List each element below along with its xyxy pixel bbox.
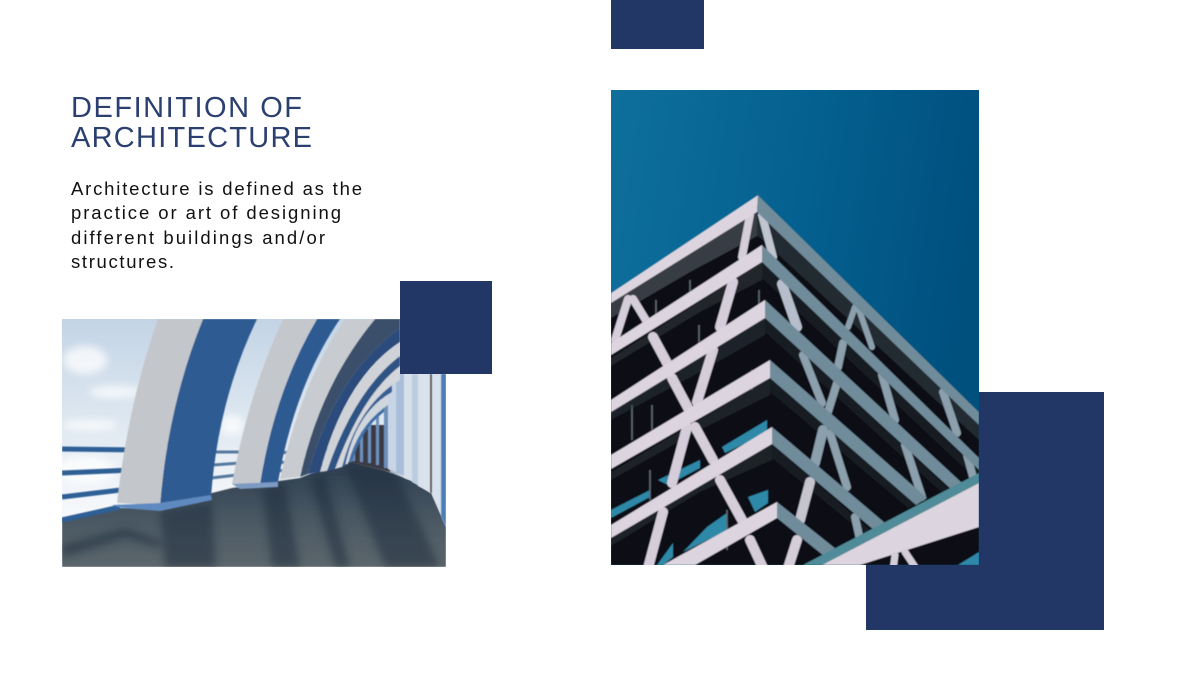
body text: Architecture is defined as the bbox=[71, 178, 362, 199]
body text: structures. bbox=[71, 251, 174, 272]
decorative square: large bottom right bbox=[866, 392, 1104, 630]
body text bbox=[71, 178, 362, 272]
body text: different buildings and/or bbox=[71, 227, 325, 248]
columns: left side bbox=[615, 215, 797, 568]
clouds bbox=[55, 346, 244, 484]
windows bbox=[611, 420, 979, 565]
rails bbox=[62, 443, 168, 520]
decorative square: top bbox=[611, 0, 704, 49]
title: ARCHITECTURE bbox=[71, 122, 312, 154]
photo: arched corridor bbox=[55, 319, 446, 567]
building dark body bbox=[611, 195, 979, 565]
floor bbox=[62, 460, 446, 567]
floor reflections bbox=[62, 465, 440, 567]
right wall strips bbox=[345, 425, 390, 472]
slabs: right wings bbox=[757, 195, 979, 556]
soffits: left bbox=[611, 210, 772, 546]
arch 1 bbox=[160, 319, 257, 505]
arch 2 bbox=[260, 319, 340, 484]
slabs: left wings bbox=[611, 195, 777, 565]
body text: practice or art of designing bbox=[71, 202, 341, 223]
decorative square: overlapping photo bbox=[400, 281, 492, 374]
title: DEFINITION OF bbox=[71, 92, 302, 124]
balcony railing and bottom slab bbox=[803, 473, 979, 565]
columns: right side bbox=[800, 307, 973, 540]
mullions bbox=[632, 280, 759, 550]
title bbox=[71, 92, 312, 154]
soffits: right bbox=[757, 210, 979, 533]
photo: modern building against blue sky bbox=[611, 90, 979, 570]
arches 3 to 8 bbox=[345, 405, 384, 462]
